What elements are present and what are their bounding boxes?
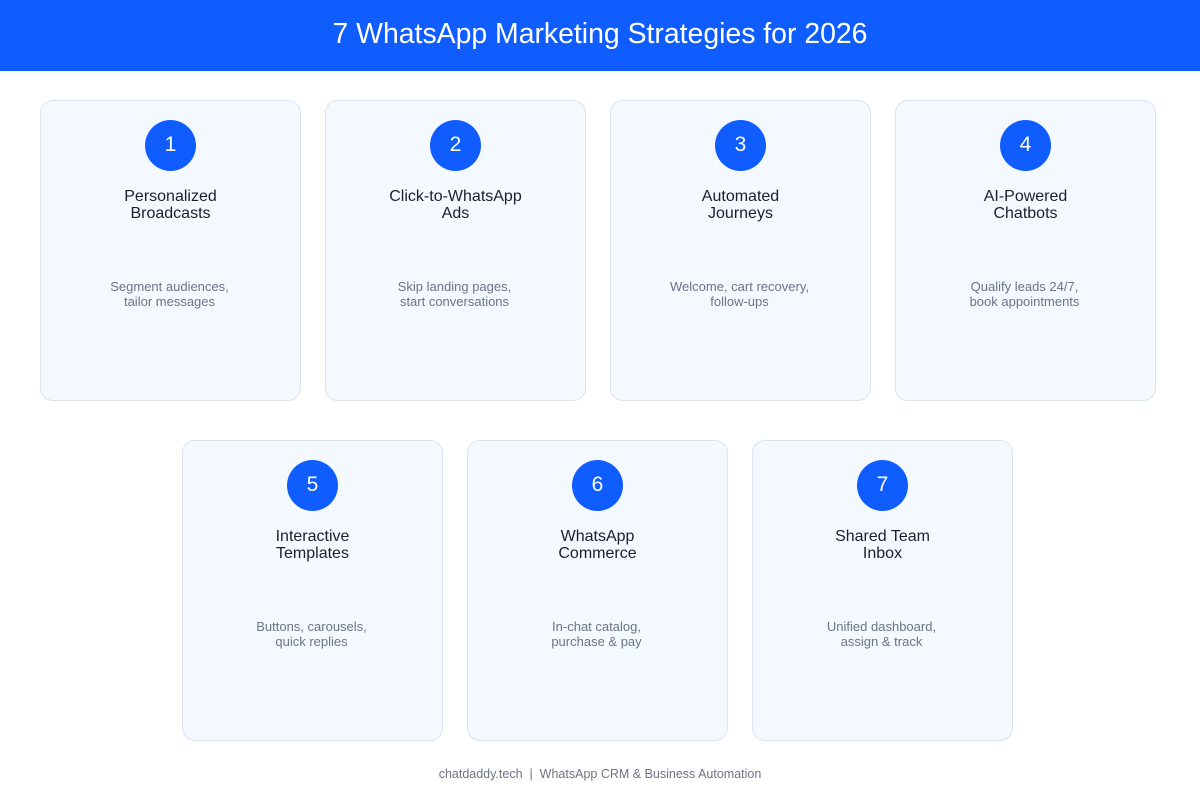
card 4: Chatbots (993, 205, 1058, 222)
card 5: 5 (307, 473, 318, 496)
card 6: WhatsApp (561, 528, 634, 545)
card 2: Skip landing pages, (398, 279, 511, 294)
card 1: Personalized (124, 188, 217, 205)
card 4 (895, 100, 1156, 401)
card 6: purchase & pay (551, 634, 642, 649)
card 7 (752, 440, 1013, 741)
card 2: Click-to-WhatsApp (389, 188, 522, 205)
card 5 (182, 440, 443, 741)
card 3 (610, 100, 871, 401)
card 7: Unified dashboard, (827, 619, 936, 634)
card 2 (325, 100, 586, 401)
card 1: Segment audiences, (110, 279, 229, 294)
card 3: Automated (702, 188, 779, 205)
title (0, 0, 1200, 71)
card 5: Interactive (276, 528, 349, 545)
card 7: Inbox (863, 545, 902, 562)
card 6: 6 (592, 473, 603, 496)
card 1: tailor messages (124, 294, 215, 309)
card 3: Journeys (708, 205, 773, 222)
card 7: assign & track (841, 634, 922, 649)
card 2: start conversations (400, 294, 509, 309)
card 4: Qualify leads 24/7, (971, 279, 1078, 294)
card 6 (467, 440, 728, 741)
card 6: In-chat catalog, (552, 619, 641, 634)
title: 7 WhatsApp Marketing Strategies for 2026 (332, 18, 867, 50)
footer: chatdaddy.tech | WhatsApp CRM & Business Automation (439, 767, 761, 781)
card 5: Buttons, carousels, (256, 619, 367, 634)
card 7: Shared Team (835, 528, 930, 545)
card 3: Welcome, cart recovery, (670, 279, 809, 294)
card 4: AI-Powered (984, 188, 1067, 205)
card 6: Commerce (558, 545, 637, 562)
card 7: 7 (877, 473, 888, 496)
card 2: 2 (450, 133, 461, 156)
card 5: Templates (276, 545, 349, 562)
card 1 (40, 100, 301, 401)
card 1: Broadcasts (130, 205, 211, 222)
card 2: Ads (442, 205, 469, 222)
card 4: 4 (1020, 133, 1031, 156)
card 3: follow-ups (710, 294, 769, 309)
card 4: book appointments (970, 294, 1079, 309)
card 3: 3 (735, 133, 746, 156)
card 1: 1 (165, 133, 176, 156)
card 5: quick replies (275, 634, 348, 649)
